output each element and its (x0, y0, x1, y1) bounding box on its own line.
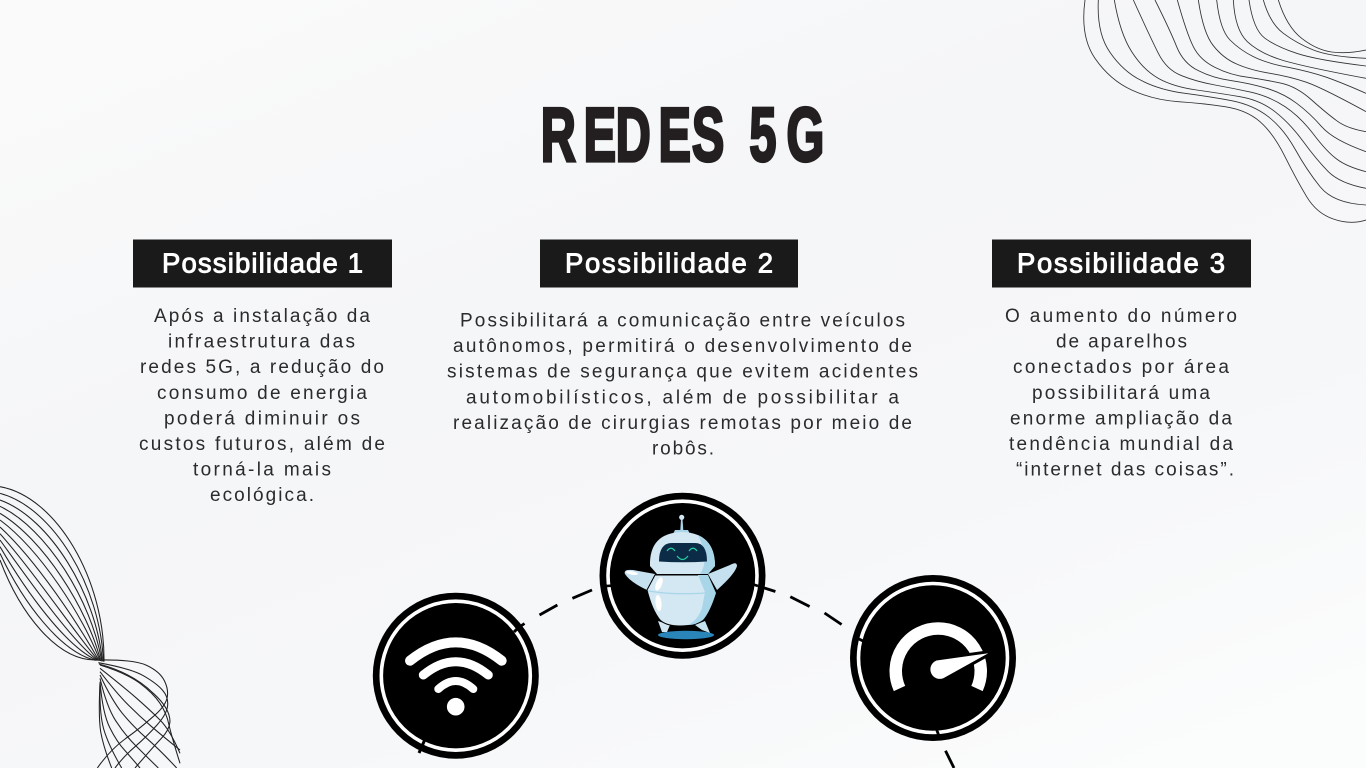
decorative wavy lines bottom left (0, 487, 180, 768)
panel: possibilidade 2 (447, 240, 918, 460)
text block: possibilidade 2: autônomos, permitirá o desenvolvimento de (453, 336, 912, 357)
heading: possibilidade 3 (992, 240, 1251, 288)
text block: possibilidade 3: possibilitará uma (1032, 383, 1210, 404)
text block: possibilidade 3: conectados por área (1013, 357, 1229, 378)
text block: possibilidade 2: robôs. (652, 438, 714, 460)
icon: wifi circle (373, 593, 539, 759)
text block: possibilidade 2: realização de cirurgias remotas por meio de (453, 413, 912, 434)
dashed connector arc (518, 585, 954, 768)
text block: possibilidade 2 (447, 310, 918, 460)
heading: possibilidade 3: Possibilidade 3 (1017, 248, 1225, 278)
text block: possibilidade 3: tendência mundial da (1009, 434, 1233, 455)
panel: possibilidade 1 (133, 240, 392, 506)
text block: possibilidade 1 (139, 306, 385, 506)
text block: possibilidade 1: poderá diminuir os (164, 408, 360, 429)
heading: possibilidade 2: Possibilidade 2 (565, 248, 773, 278)
icon: robot circle (600, 493, 766, 659)
text block: possibilidade 1: Após a instalação da (154, 306, 370, 327)
text block: possibilidade 3: de aparelhos (1056, 332, 1187, 353)
text block: possibilidade 1: torná-la mais (193, 460, 331, 481)
text block: possibilidade 2: automobilísticos, além de possibilitar a (466, 387, 899, 408)
text block: possibilidade 2: Possibilitará a comunicação entre veículos (460, 310, 905, 332)
text block: possibilidade 1: consumo de energia (157, 383, 367, 404)
title: REDES 5G (541, 92, 824, 178)
heading: possibilidade 1: Possibilidade 1 (162, 248, 363, 278)
text block: possibilidade 3: O aumento do número (1005, 306, 1237, 327)
text block: possibilidade 3 (1005, 306, 1237, 481)
decorative wavy lines top right (1084, 0, 1366, 222)
panel: possibilidade 3 (992, 240, 1251, 481)
text block: possibilidade 1: infraestrutura das (168, 332, 355, 353)
text block: possibilidade 1: custos futuros, além de (139, 434, 385, 455)
robot illustration (625, 515, 737, 639)
icon: speedometer circle (850, 575, 1016, 741)
text block: possibilidade 1: redes 5G, a redução do (140, 357, 384, 378)
heading: possibilidade 1 (133, 240, 392, 288)
text block: possibilidade 3: enorme ampliação da (1010, 408, 1232, 429)
text block: possibilidade 3: “internet das coisas”. (1016, 460, 1234, 481)
text block: possibilidade 2: sistemas de segurança que evitem acidentes (447, 362, 918, 383)
heading: possibilidade 2 (540, 240, 798, 288)
text block: possibilidade 1: ecológica. (210, 485, 314, 506)
